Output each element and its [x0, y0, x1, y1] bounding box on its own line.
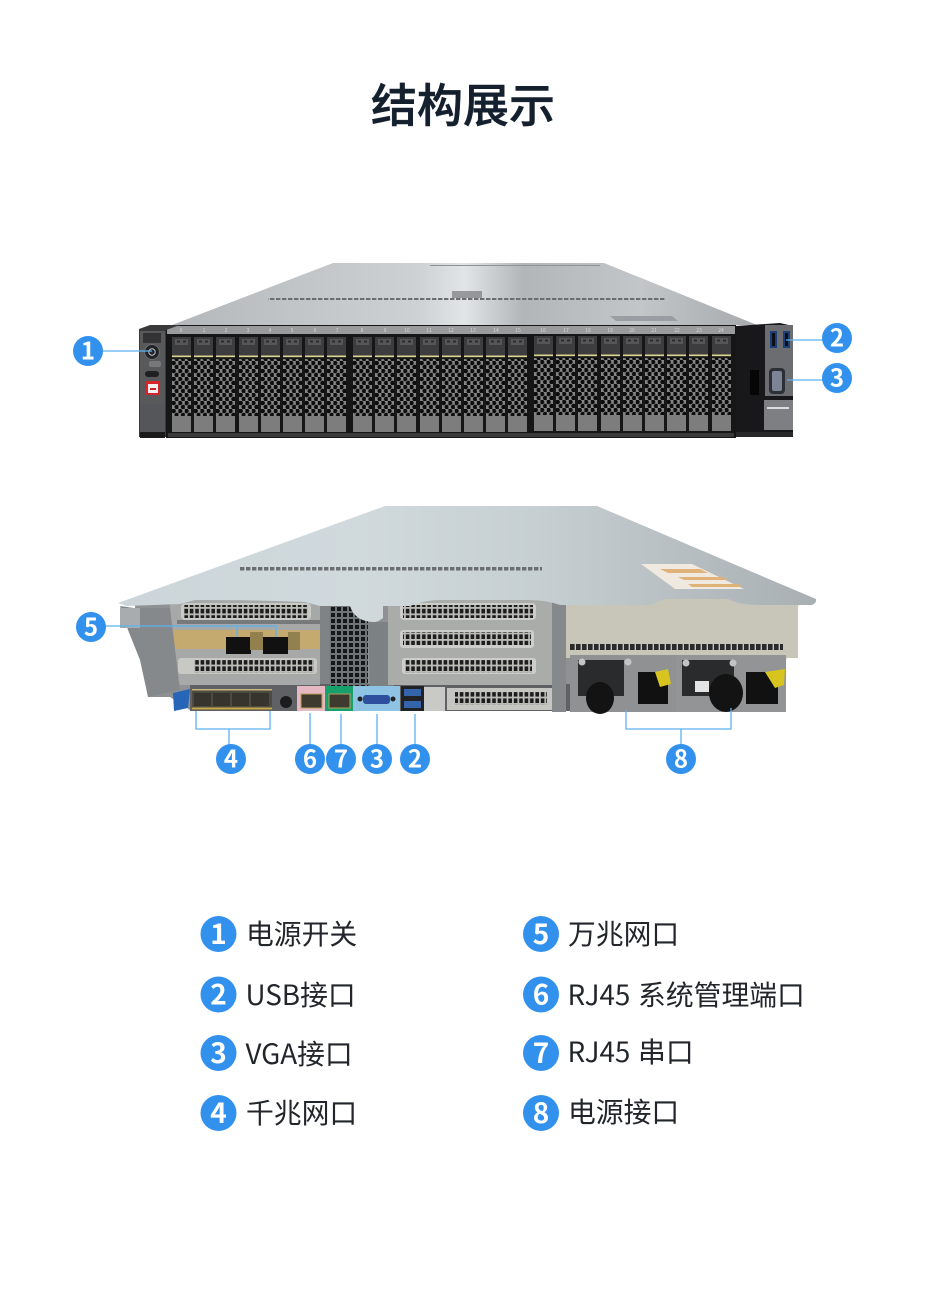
rear left bracket	[120, 606, 180, 697]
legend item 4: 4	[210, 1092, 227, 1132]
drive bay numbers: 13	[470, 327, 476, 334]
legend item 2: 2	[210, 974, 227, 1014]
drive bay numbers: 23	[696, 327, 702, 334]
legend item 8: 电源接口	[568, 1091, 679, 1131]
marker 6 rear: 6	[303, 740, 317, 774]
drive bay numbers: 4	[269, 327, 272, 334]
marker 2 front	[822, 318, 852, 354]
marker 3 rear	[362, 740, 392, 774]
drive bay numbers: 17	[563, 327, 569, 334]
legend item 1: 1	[210, 913, 227, 953]
legend	[200, 913, 805, 1132]
optical transceivers	[226, 632, 300, 654]
VGA port	[353, 686, 400, 711]
management RJ45 port	[297, 686, 325, 711]
drive bay numbers: 3	[247, 327, 250, 334]
marker 8 rear	[666, 740, 696, 774]
callout lines	[100, 340, 825, 746]
drive bay numbers: 10	[404, 327, 410, 334]
legend item 6: RJ45 系统管理端口	[568, 974, 805, 1014]
serial RJ45 port	[325, 686, 353, 711]
rear chassis body	[134, 598, 800, 712]
legend item 5: 5	[533, 913, 549, 953]
rear top cover	[118, 506, 816, 622]
marker 6 rear	[295, 740, 325, 774]
front server photo	[139, 263, 793, 438]
drive bay numbers: 2	[225, 327, 228, 334]
legend item 7: 7	[533, 1032, 549, 1072]
marker 7 rear: 7	[334, 740, 348, 774]
drive bay numbers: 22	[674, 327, 680, 334]
front left ear with power button	[139, 325, 180, 438]
legend item 5: 万兆网口	[568, 913, 679, 953]
drive bay numbers: 24	[718, 327, 724, 334]
marker 2 rear	[400, 740, 430, 774]
marker 3 front	[822, 358, 852, 394]
drive bays 0 to 24	[172, 336, 731, 432]
blue latch	[173, 689, 190, 711]
front chassis bay	[166, 325, 736, 438]
drive bay numbers: 15	[515, 327, 521, 334]
drive bay numbers: 11	[426, 327, 432, 334]
rear USB ports	[401, 686, 424, 711]
marker 1 front: 1	[81, 332, 95, 366]
legend item 3: VGA接口	[246, 1033, 353, 1073]
drive bay numbers: 7	[336, 327, 339, 334]
drive bay numbers: 18	[585, 327, 591, 334]
drive bay numbers: 1	[203, 327, 206, 334]
drive bay numbers: 0	[180, 327, 183, 334]
legend item 4: 千兆网口	[246, 1092, 357, 1132]
gigabit LAN ports	[192, 689, 292, 710]
front server top cover	[172, 263, 757, 325]
front right ear with USB and VGA	[736, 323, 793, 437]
rear low profile slot	[424, 687, 552, 711]
marker 1 front	[73, 332, 103, 366]
marker 7 rear	[326, 740, 356, 774]
legend item 6: 6	[533, 974, 549, 1014]
marker 5 rear: 5	[84, 608, 98, 642]
drive bay numbers: 20	[629, 327, 635, 334]
legend item 7: RJ45 串口	[568, 1031, 694, 1071]
rear centre mesh	[320, 600, 394, 694]
marker 3 rear: 3	[370, 740, 384, 774]
rear server photo	[118, 506, 816, 714]
drive bay numbers: 8	[361, 327, 364, 334]
drive bay numbers: 5	[291, 327, 294, 334]
drive bay numbers: 16	[540, 327, 546, 334]
legend item 8: 8	[533, 1092, 549, 1132]
legend item 8	[523, 1091, 679, 1132]
rear left PCIe cards	[170, 598, 320, 685]
marker 4 rear: 4	[224, 740, 238, 774]
drive bay numbers: 6	[314, 327, 317, 334]
power supply units	[570, 655, 786, 714]
legend item 2: USB接口	[246, 974, 356, 1014]
marker 4 rear	[216, 740, 246, 774]
marker 2 rear: 2	[408, 740, 422, 774]
drive bay numbers: 12	[448, 327, 454, 334]
marker 3 front: 3	[830, 358, 844, 394]
marker 2 front: 2	[830, 318, 844, 354]
legend item 3	[200, 1032, 353, 1073]
rear right PCIe cards	[388, 598, 566, 712]
drive bay numbers: 21	[651, 327, 657, 334]
legend item 1: 电源开关	[246, 913, 357, 953]
marker 5 rear	[76, 608, 106, 642]
title: 结构展示	[371, 70, 555, 136]
marker 8 rear: 8	[674, 740, 688, 774]
drive bay numbers	[180, 327, 724, 334]
PSU bay vent wall	[566, 598, 798, 658]
drive bay numbers: 19	[607, 327, 613, 334]
drive bay numbers: 14	[493, 327, 499, 334]
drive bay numbers: 9	[384, 327, 387, 334]
legend item 3: 3	[210, 1032, 227, 1072]
